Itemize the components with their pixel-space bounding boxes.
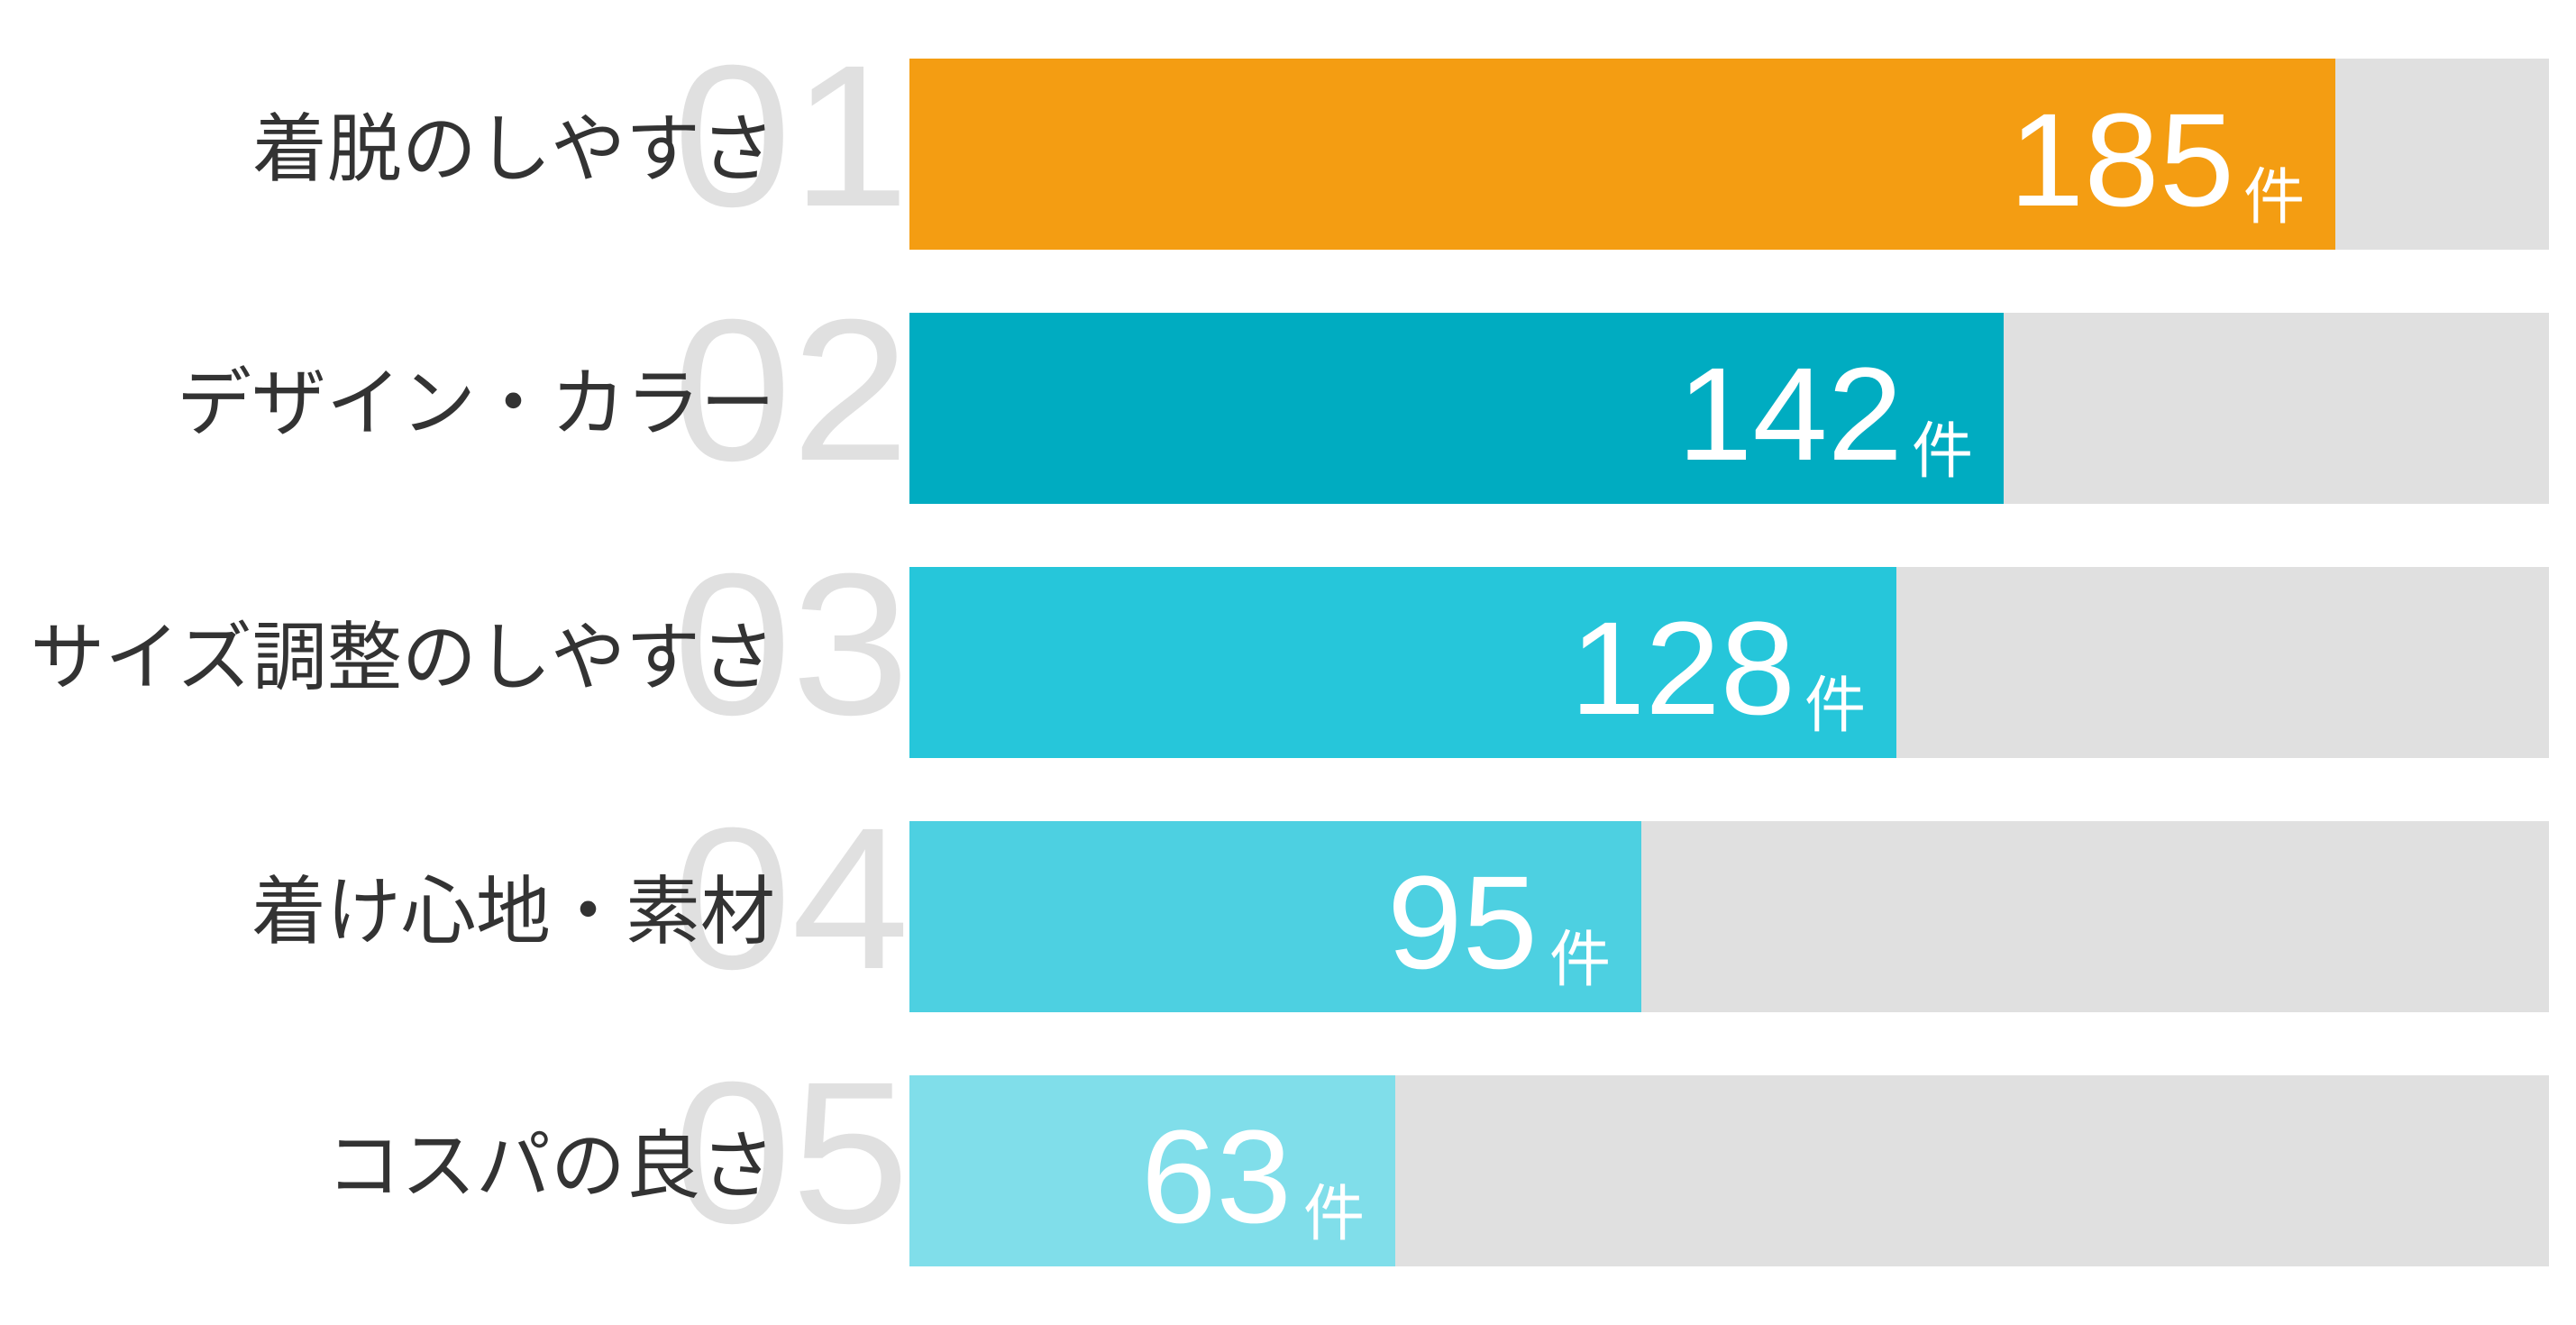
bar track: [909, 821, 2549, 1012]
bar track: [909, 1075, 2549, 1266]
unit: 件: [2243, 163, 2305, 232]
bar fill 128: [909, 567, 1896, 758]
bar fill 63: [909, 1075, 1395, 1266]
row 3: サイズ調整のしやすさ: [30, 532, 2549, 758]
unit: 件: [1804, 672, 1866, 740]
bar fill 142: [909, 313, 2004, 504]
value 128: 128: [1570, 595, 1795, 743]
value 63: 63: [1141, 1103, 1292, 1251]
bar fill 95: [909, 821, 1641, 1012]
row 2: デザイン・カラー: [177, 278, 2549, 504]
rank number 01: 01: [673, 23, 909, 249]
label: コスパの良さ: [326, 1124, 775, 1208]
label: 着脱のしやすさ: [252, 107, 775, 191]
label: サイズ調整のしやすさ: [30, 616, 775, 699]
unit: 件: [1303, 1180, 1365, 1248]
rank number 04: 04: [673, 786, 909, 1011]
unit: 件: [1549, 926, 1611, 994]
rank number 02: 02: [673, 278, 909, 503]
rank number 03: 03: [673, 532, 909, 757]
bar track: [909, 59, 2549, 250]
unit: 件: [1912, 417, 1973, 486]
value 142: 142: [1677, 341, 1903, 489]
row 1: 着脱のしやすさ: [252, 23, 2549, 250]
row 5: コスパの良さ: [326, 1040, 2549, 1266]
row 4: 着け心地・素材: [251, 786, 2549, 1012]
label: デザイン・カラー: [177, 361, 775, 445]
bar track: [909, 567, 2549, 758]
value 95: 95: [1387, 849, 1538, 997]
value 185: 185: [2009, 87, 2234, 234]
label: 着け心地・素材: [251, 870, 775, 954]
bar fill 185: [909, 59, 2335, 250]
rank number 05: 05: [673, 1040, 909, 1266]
bar track: [909, 313, 2549, 504]
